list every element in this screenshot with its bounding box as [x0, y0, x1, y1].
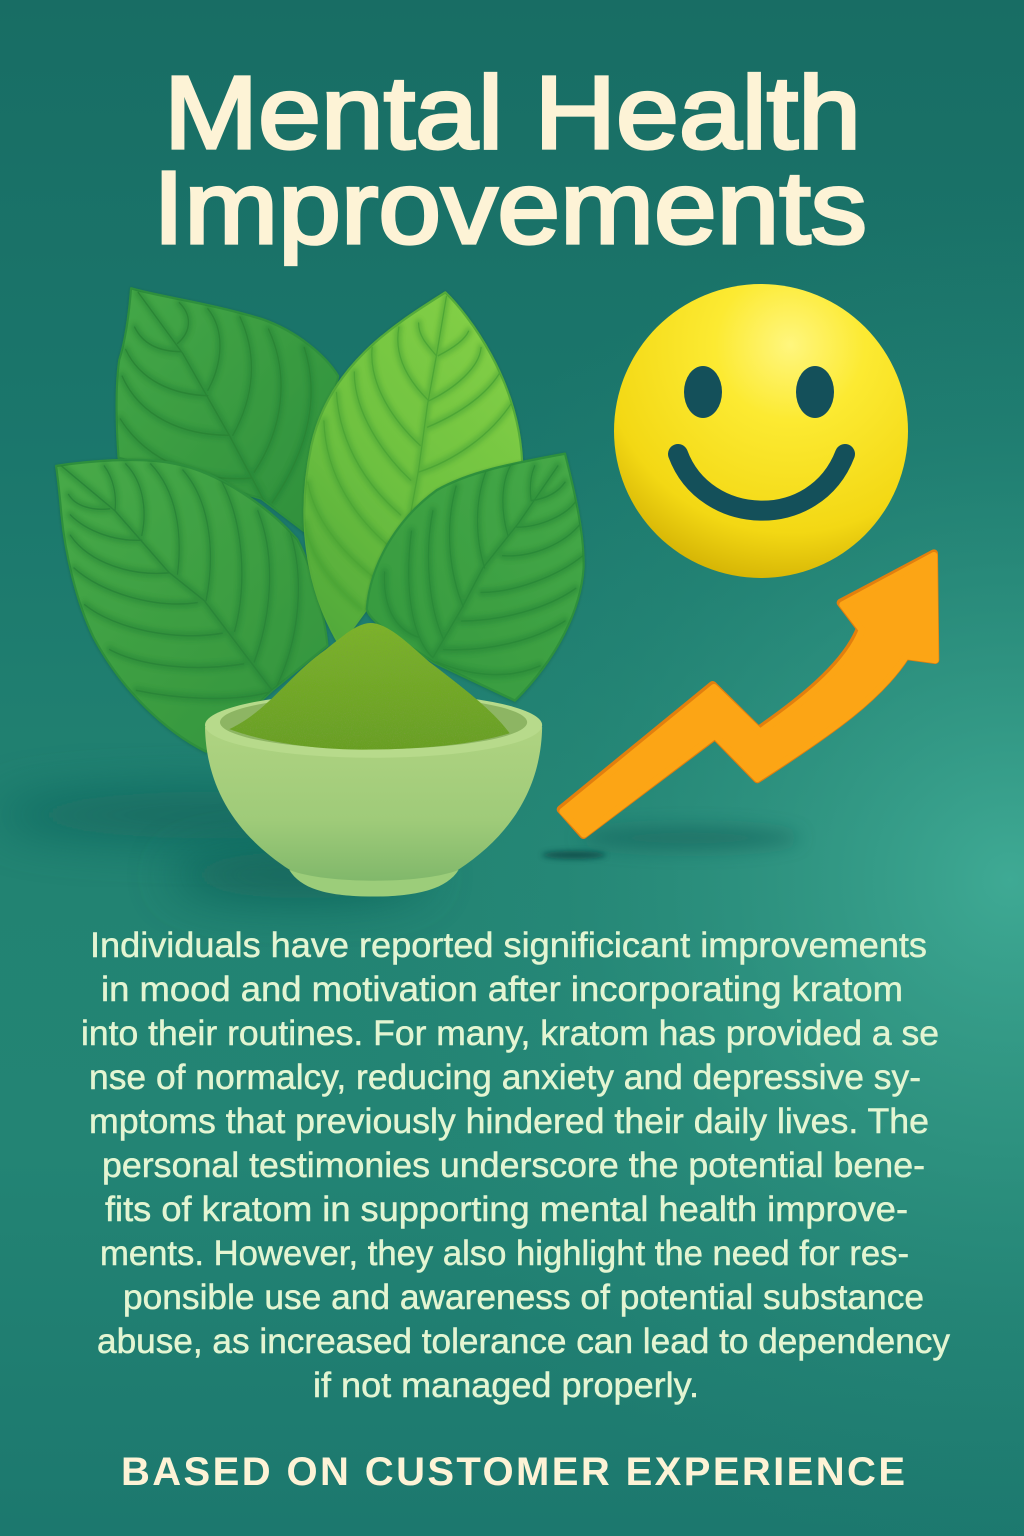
body text: ponsible use and awareness of potential substance — [123, 1278, 924, 1317]
arrow: rising trend — [561, 553, 935, 835]
body text: in mood and motivation after incorporating kratom — [101, 970, 903, 1009]
body text: into their routines. For many, kratom has provided a se — [81, 1014, 939, 1053]
body text — [81, 926, 951, 1405]
body text: mptoms that previously hindered their daily lives. The — [89, 1102, 929, 1141]
body text: Individuals have reported significicant improvements — [90, 926, 927, 965]
body text: ments. However, they also highlight the need for res- — [100, 1234, 909, 1273]
right eye — [796, 366, 834, 418]
smile — [678, 454, 845, 511]
leaf: front left — [56, 460, 327, 752]
body text: fits of kratom in supporting mental health improve- — [105, 1190, 908, 1229]
bowl foot — [289, 870, 459, 897]
body text: personal testimonies underscore the potential bene- — [102, 1146, 925, 1185]
bowl body — [205, 727, 542, 897]
footer caption: BASED ON CUSTOMER EXPERIENCE — [121, 1450, 905, 1494]
illustration: bowl of green powder — [205, 623, 542, 897]
body text: if not managed properly. — [313, 1366, 699, 1405]
illustration: ground shadows — [0, 791, 800, 899]
title: Improvements — [153, 150, 867, 265]
bowl inner — [220, 695, 527, 749]
powder mound — [229, 623, 510, 750]
body text: nse of normalcy, reducing anxiety and depressive sy- — [89, 1058, 921, 1097]
illustration: kratom leaves — [56, 288, 584, 752]
leaf: center — [304, 292, 522, 646]
body text: abuse, as increased tolerance can lead to dependency — [97, 1322, 951, 1361]
title — [153, 55, 867, 265]
left eye — [684, 366, 722, 418]
bowl rim — [205, 692, 542, 758]
icon: smiley face — [614, 284, 908, 578]
leaf: back left — [117, 288, 338, 531]
leaf: front right — [367, 454, 584, 701]
title: Mental Health — [164, 55, 861, 170]
